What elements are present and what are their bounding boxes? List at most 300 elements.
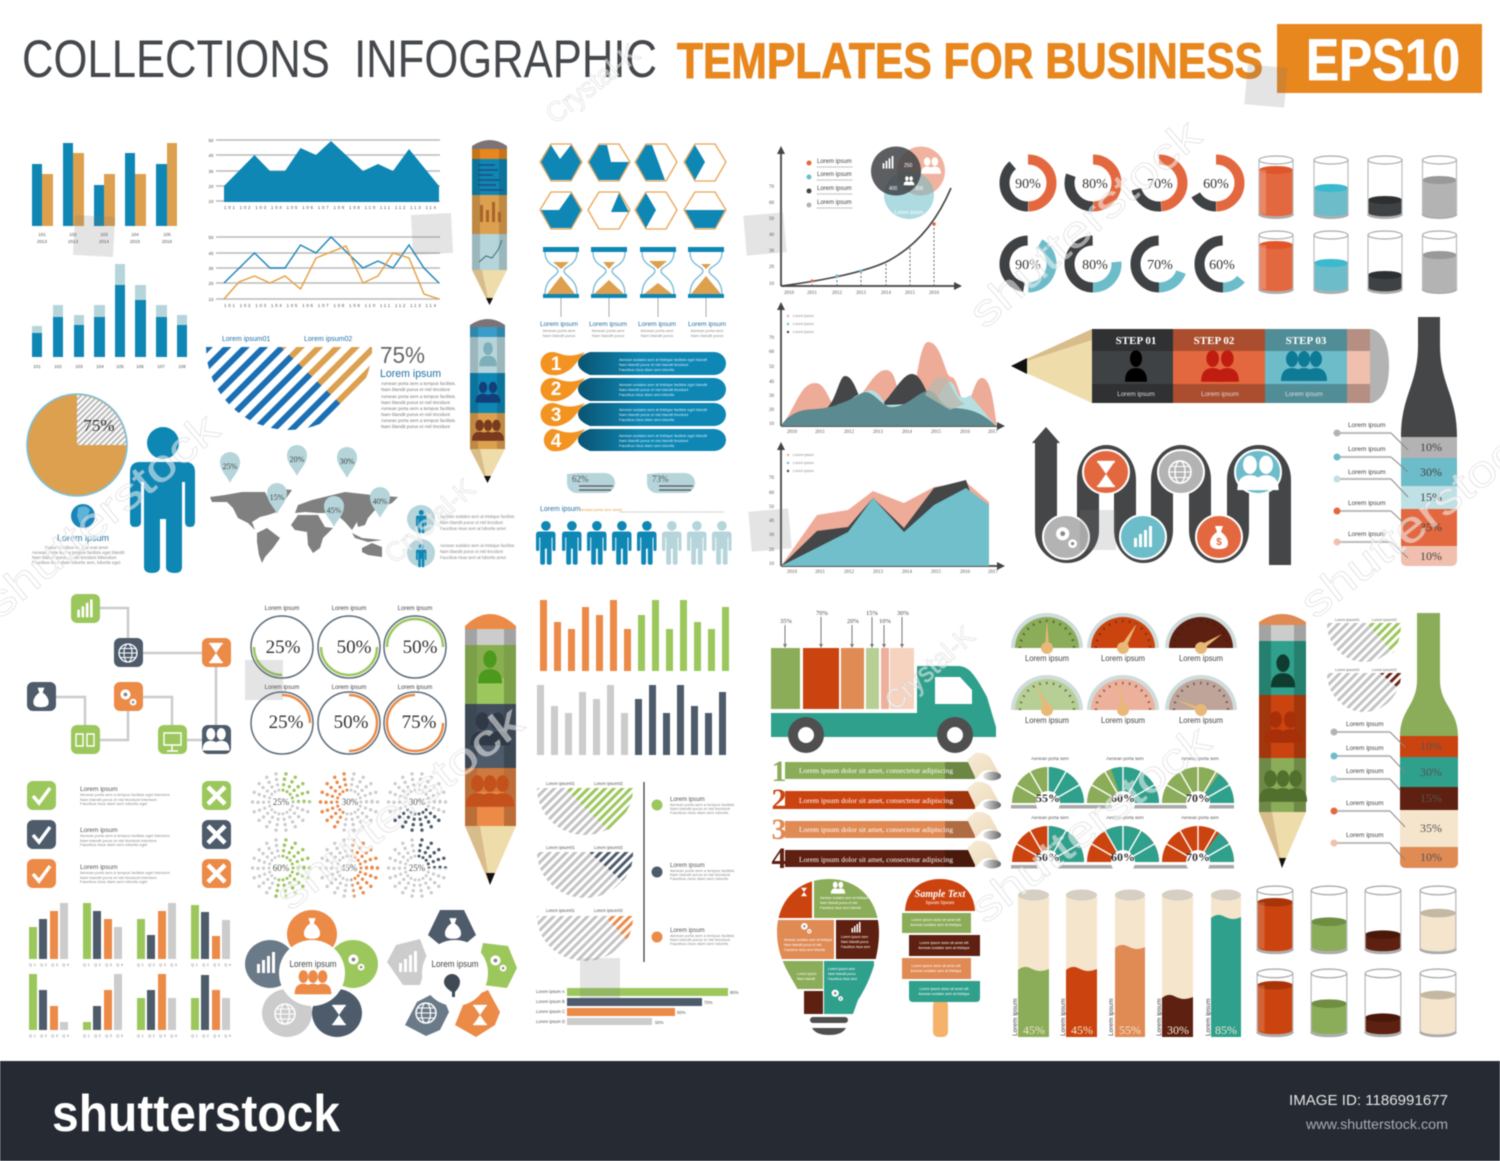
hourglasses with labels: Aenean porta sem xyxy=(543,328,576,333)
tube level chart: 55% xyxy=(1119,1023,1141,1037)
light bulb infographic: Nam blandit purus xyxy=(841,940,869,944)
bottle infographic green: 30% xyxy=(1420,765,1442,779)
flower diagram with circles xyxy=(245,910,378,1037)
layered area chart: 60 xyxy=(769,491,774,496)
light bulb infographic: Aenean sodales sem at tristique xyxy=(820,896,868,900)
hatched half-circle charts with legend: Lorem ipsum xyxy=(670,797,705,803)
tube level chart: 45% xyxy=(1023,1023,1045,1037)
bar chart: stacked blue bars: 105 xyxy=(116,364,124,369)
map legend with people icons: Nam blandit purus et nisl tincidunt xyxy=(440,520,504,525)
horizontal bar chart xyxy=(536,988,739,1025)
circular gauge rings: 25% xyxy=(269,712,304,733)
bar chart: paired blue and tan bars: 2016 xyxy=(162,239,173,244)
numbered scroll banners: 1 xyxy=(772,755,786,788)
popsicle signpost infographic: Aenean sodales sem at tristique xyxy=(910,969,962,973)
layered area chart: 40 xyxy=(769,519,774,524)
donut charts row one: 60% xyxy=(1203,177,1229,192)
mountain area chart: 10 xyxy=(769,422,774,427)
checklist with check and cross icons: Nam blandit purus et nisl tincidunt interdum xyxy=(80,838,157,843)
layered area chart: Lorem ipsum xyxy=(793,461,814,465)
tube level chart: 30% xyxy=(1167,1023,1189,1037)
bar chart: stacked blue bars xyxy=(32,264,187,369)
bottle callouts green: Lorem ipsum xyxy=(1346,800,1384,807)
map legend with people icons: Aenean sodales sem at tristique facilisis xyxy=(440,514,514,519)
bottle callouts dark: Lorem ipsum xyxy=(1348,531,1386,538)
world map with percentage pins: 25% xyxy=(223,462,238,471)
checklist with check and cross icons: Nam blandit purus et nisl tincidunt interdum xyxy=(80,797,157,802)
checklist with check and cross icons: Aenean porta sem a tempus facilisis eget interdum xyxy=(80,870,170,875)
curve chart with venn diagram: 40 xyxy=(769,233,774,238)
donut charts row one: 70% xyxy=(1147,177,1173,192)
layered area chart: 70 xyxy=(769,476,774,481)
mountain area chart: 70 xyxy=(769,336,774,341)
area chart: 20 xyxy=(208,184,214,189)
curve chart with venn diagram: Lorem ipsum xyxy=(895,210,923,216)
checklist with check and cross icons: Lorem ipsum xyxy=(80,827,118,834)
area chart: 50 xyxy=(208,138,214,143)
hatched half-circle charts with legend: Lorem ipsum01 xyxy=(546,908,576,913)
numbered ribbon list: Nam blandit purus et nisl blandit tincidunt xyxy=(619,413,689,417)
bottle infographic green: 35% xyxy=(1420,821,1442,835)
checklist with check and cross icons: Faucibus risus diam sem lobortis eget xyxy=(80,879,148,884)
title xyxy=(22,24,1482,93)
curve chart with venn diagram: 2016 xyxy=(929,291,940,296)
hatched half-circle chart with 75% text: Nam blandit purus et nisl tincidunt xyxy=(381,400,451,405)
curve chart with venn diagram: 50 xyxy=(769,217,774,222)
hourglasses with labels xyxy=(540,247,727,338)
hatched half-circle charts with legend: Lorem ipsum02 xyxy=(594,781,624,786)
hatched half-circle chart with 75% text xyxy=(206,336,456,440)
popsicle signpost infographic: Aenean sodales sem at tristique xyxy=(918,946,970,950)
tube level chart: Lorem ipsum xyxy=(1108,998,1115,1036)
light bulb infographic: Nam blandit purus xyxy=(828,972,856,976)
bar chart: paired blue and tan bars: 2013 xyxy=(37,239,48,244)
half-round percentage gauges green: 60% xyxy=(1111,791,1135,805)
bottle infographic green: 10% xyxy=(1420,850,1442,864)
popsicle signpost infographic: Lorem ipsum dolor sit amet elit xyxy=(920,941,968,945)
half-round percentage gauges green: Aenean porta sem xyxy=(1031,756,1069,761)
light bulb infographic: Faucibus risus sem xyxy=(828,977,857,981)
circular gauge rings xyxy=(251,606,446,754)
popsicle signpost infographic: Lorem ipsum dolor sit amet elit xyxy=(912,964,960,968)
hourglasses with labels: Lorem ipsum xyxy=(589,321,628,328)
numbered ribbon list: Faucibus risus diam sem lobortis xyxy=(619,368,674,372)
small grouped bar charts: Q1 Q2 Q3 Q4 xyxy=(29,963,69,967)
mountain area chart xyxy=(769,302,1005,435)
tube level chart: Lorem ipsum xyxy=(1060,998,1067,1036)
hatched half-circle charts with legend: Aenean porta sem a tempus facilisis xyxy=(670,802,734,807)
hatched half-circle charts with legend: Faucibus risus diam sem lobortis xyxy=(670,876,728,881)
radial dot charts: 25% xyxy=(273,797,290,807)
pie chart 75% xyxy=(27,394,127,496)
curve chart with venn diagram: 250 xyxy=(904,163,913,169)
bottle infographic dark: 15% xyxy=(1420,490,1442,504)
radial dot charts: 30% xyxy=(409,797,426,807)
curve chart with venn diagram: Lorem ipsum xyxy=(817,200,852,206)
hatched half-circle chart with 75% text: Aenean porta sem a tempus facilisis. xyxy=(381,381,456,386)
donut charts row two: 70% xyxy=(1147,258,1173,273)
serpentine timeline with icons: $ xyxy=(1216,537,1222,548)
map legend with people icons: Aenean sodales sem at tristique facilisis xyxy=(440,543,514,548)
hourglasses with labels: Lorem ipsum xyxy=(540,321,579,328)
numbered ribbon list: 3 xyxy=(551,405,561,426)
bar chart: paired blue and tan bars: 105 xyxy=(163,232,171,237)
bottle callouts dark: Lorem ipsum xyxy=(1348,500,1386,507)
speech bubbles 62% and 73% xyxy=(567,473,695,493)
title: TEMPLATES FOR BUSINESS xyxy=(677,33,1263,89)
world map with percentage pins: 40% xyxy=(373,497,388,506)
bar chart: orange and green bars xyxy=(540,600,729,671)
hatched half-circle chart with 75% text: Aenean porta sem a tempus facilisis. xyxy=(381,406,456,411)
popsicle signpost infographic: Sample Text xyxy=(915,889,966,900)
light bulb infographic xyxy=(777,879,879,1035)
donut charts row two: 80% xyxy=(1082,258,1108,273)
numbered ribbon list: Aenean sodales sem at tristique facilisis eget blandit xyxy=(619,383,708,387)
bar chart: stacked blue bars: 101 xyxy=(33,364,41,369)
stock watermarks: Crystal-K xyxy=(878,620,981,716)
bottle infographic dark: 10% xyxy=(1420,549,1442,563)
popsicle signpost infographic: lipsum lipsum xyxy=(926,901,954,906)
glass cylinders row one xyxy=(1259,156,1456,218)
light bulb infographic: Faucibus risus sem lobortis xyxy=(820,906,861,910)
area chart: 30 xyxy=(208,169,214,174)
circular gauge rings: Lorem ipsum xyxy=(332,606,366,612)
horizontal bar chart: 50% xyxy=(655,1020,664,1025)
light bulb infographic: Lorem ipsum xyxy=(797,972,817,976)
bar chart: stacked blue bars: 108 xyxy=(178,364,186,369)
layered area chart: 2016 xyxy=(960,570,970,575)
numbered scroll banners xyxy=(772,753,1001,875)
numbered ribbon list: 2 xyxy=(551,379,561,400)
bar chart: paired blue and tan bars: 103 xyxy=(100,232,108,237)
speedometer gauges: Lorem ipsum xyxy=(1101,716,1145,725)
curve chart with venn diagram: 2014 xyxy=(881,291,892,296)
line chart: 20 xyxy=(208,281,214,286)
hourglasses with labels: Aenean porta sem xyxy=(691,328,724,333)
curve chart with venn diagram: 20 xyxy=(769,265,774,270)
mountain area chart: 2013 xyxy=(873,430,884,435)
layered area chart: 2013 xyxy=(873,570,884,575)
flower diagram with hexagons xyxy=(387,910,517,1037)
curve chart with venn diagram: 2010 xyxy=(784,291,794,296)
half-round percentage gauges red: 50% xyxy=(1036,850,1060,864)
donut charts row two: 60% xyxy=(1209,258,1235,273)
bar chart: stacked blue bars: 106 xyxy=(136,364,144,369)
popsicle signpost infographic: Aenean sodales sem at tristique xyxy=(918,992,970,996)
layered area chart: 20 xyxy=(769,548,774,553)
layered area chart: 2012 xyxy=(844,570,854,575)
curve chart with venn diagram: Lorem ipsum xyxy=(817,172,852,178)
speedometer gauges xyxy=(1011,613,1237,725)
glass cylinders row two xyxy=(1259,231,1456,293)
hatched half-circle charts with legend: Lorem ipsum02 xyxy=(594,908,624,913)
bottle callouts green xyxy=(1330,721,1405,860)
small grouped bar charts: Q1 Q2 Q3 Q4 xyxy=(191,1034,231,1038)
circular gauge rings: Lorem ipsum xyxy=(332,685,366,691)
flower diagram with hexagons: Lorem ipsum xyxy=(432,959,479,970)
horizontal pencil steps: Lorem ipsum xyxy=(1117,391,1155,398)
bottle infographic dark: 10% xyxy=(1420,440,1442,454)
world map with percentage pins: 20% xyxy=(290,455,305,464)
truck chart: 10% xyxy=(879,618,892,625)
horizontal pencil steps: Lorem ipsum xyxy=(1285,391,1323,398)
truck chart: 70% xyxy=(816,610,829,617)
small hatched half-circles: Lorem ipsum02 xyxy=(1372,668,1397,672)
world map with percentage pins xyxy=(210,445,398,563)
speech bubbles 62% and 73%: 73% xyxy=(652,474,669,484)
world map with percentage pins: 30% xyxy=(340,457,355,466)
radial dot charts: 25% xyxy=(409,863,426,873)
small grouped bar charts: Q1 Q2 Q3 Q4 xyxy=(83,1034,123,1038)
bottle callouts dark xyxy=(1334,422,1408,558)
bar chart: stacked blue bars: 107 xyxy=(157,364,165,369)
small grouped bar charts: Q1 Q2 Q3 Q4 xyxy=(191,963,231,967)
hourglasses with labels: Lorem ipsum xyxy=(688,321,727,328)
half-round percentage gauges red: 60% xyxy=(1111,850,1135,864)
hatched half-circle charts with legend: Lorem ipsum02 xyxy=(594,845,624,850)
pencil: green navy orange xyxy=(465,614,516,885)
truck chart xyxy=(771,610,996,753)
curve chart with venn diagram: 10 xyxy=(769,282,774,287)
hatched half-circle chart with 75% text: Nam blandit purus et nisl tincidunt xyxy=(381,387,451,392)
hatched half-circle chart with 75% text: 75% xyxy=(380,342,425,368)
hatched half-circle charts with legend: Nam blandit purus et nisl tincidunt xyxy=(670,937,731,942)
small hatched half-circles: Lorem ipsum01 xyxy=(1335,668,1360,672)
stock watermarks: shutterstock xyxy=(266,696,534,920)
small hatched half-circles xyxy=(1327,618,1401,712)
mountain area chart: 50 xyxy=(769,365,774,370)
truck chart: 15% xyxy=(866,610,879,617)
hatched half-circle charts with legend: Nam blandit purus et nisl tincidunt xyxy=(670,872,731,877)
popsicle signpost infographic xyxy=(902,879,980,1037)
area chart: 101 102 103 104 105 106 107 108 109 110 111 112 113 114 xyxy=(224,205,436,210)
footer bar: shutterstock xyxy=(52,1085,340,1143)
circular gauge rings: 50% xyxy=(334,712,369,733)
numbered scroll banners: 2 xyxy=(772,783,786,816)
hourglasses with labels: Nam blandit purus xyxy=(592,333,624,338)
horizontal bar chart: 80% xyxy=(730,990,739,995)
hatched half-circle chart with 75% text: Aenean porta sem a tempus facilisis. xyxy=(381,418,456,423)
mountain area chart: Lorem ipsum xyxy=(793,314,814,318)
tube level chart: Lorem ipsum xyxy=(1205,998,1212,1036)
checklist with check and cross icons: Aenean porta sem a tempus facilisis eget interdum xyxy=(80,833,170,838)
footer bar: www.shutterstock.com xyxy=(1305,1116,1448,1132)
mountain area chart: 20 xyxy=(769,408,774,413)
small grouped bar charts: Q1 Q2 Q3 Q4 xyxy=(29,1034,69,1038)
light bulb infographic: Faucibus risus sem xyxy=(841,945,870,949)
icon: standing person xyxy=(130,427,195,573)
bottle callouts green: Lorem ipsum xyxy=(1346,721,1384,728)
checklist with check and cross icons: Faucibus risus diam sem lobortis eget xyxy=(80,842,148,847)
serpentine timeline with icons xyxy=(1032,427,1281,565)
donut charts row one xyxy=(1004,158,1240,208)
line chart: 10 xyxy=(208,297,214,302)
checklist with check and cross icons xyxy=(27,781,231,888)
layered area chart: 30 xyxy=(769,533,774,538)
half-round percentage gauges red: 70% xyxy=(1186,850,1210,864)
bottle callouts dark: Lorem ipsum xyxy=(1348,422,1386,429)
area chart: 10 xyxy=(208,199,214,204)
radial dot charts xyxy=(252,774,446,896)
bar chart: stacked blue bars: 102 xyxy=(54,364,62,369)
small hatched half-circles: Lorem ipsum01 xyxy=(1335,618,1360,622)
globe caption block: Lorem ipsum xyxy=(57,533,109,543)
numbered scroll banners: Lorem ipsum dolor sit amet, consectetur adipiscing xyxy=(799,855,953,864)
title: EPS10 xyxy=(1306,28,1460,93)
tube level chart xyxy=(1012,890,1241,1037)
circular gauge rings: 25% xyxy=(266,637,301,658)
glass beakers row two xyxy=(1257,969,1456,1036)
hatched half-circle charts with legend xyxy=(537,781,734,962)
people pictogram row xyxy=(536,506,732,565)
bottle infographic dark xyxy=(1401,317,1457,566)
bottle callouts green: Lorem ipsum xyxy=(1346,832,1384,839)
tube level chart: Lorem ipsum xyxy=(1012,998,1019,1036)
hourglasses with labels: Nam blandit purus xyxy=(691,333,723,338)
bar chart: paired blue and tan bars: 2014 xyxy=(99,239,110,244)
curve chart with venn diagram: 2011 xyxy=(807,291,817,296)
footer bar xyxy=(0,1061,1500,1161)
layered area chart: 10 xyxy=(769,562,774,567)
bottle callouts green: Lorem ipsum xyxy=(1346,745,1384,752)
numbered ribbon list: Aenean sodales sem at tristique facilisis eget blandit xyxy=(619,408,708,412)
numbered ribbon list: 1 xyxy=(551,354,562,375)
stock watermarks: Crystal-K xyxy=(540,37,646,130)
small grouped bar charts: Q1 Q2 Q3 Q4 xyxy=(137,963,177,967)
bottle infographic green: 10% xyxy=(1420,739,1442,753)
horizontal pencil steps xyxy=(1011,329,1389,403)
bottle callouts dark: Lorem ipsum xyxy=(1348,446,1386,453)
small grouped bar charts: Q1 Q2 Q3 Q4 xyxy=(137,1034,177,1038)
horizontal bar chart: Lorem ipsum B xyxy=(536,999,565,1004)
line chart xyxy=(208,235,440,308)
layered area chart xyxy=(769,442,1005,575)
mountain area chart: Lorem ipsum xyxy=(793,330,814,334)
numbered ribbon list: Faucibus risus diam sem lobortis xyxy=(619,418,674,422)
line chart: 50 xyxy=(208,235,214,240)
numbered ribbon list: Faucibus risus diam sem lobortis xyxy=(619,444,674,448)
light bulb infographic: Nam blandit purus et nisl xyxy=(784,943,822,947)
stock watermarks: shutterstock xyxy=(961,715,1221,933)
flower diagram with circles: Lorem ipsum xyxy=(290,959,337,970)
curve chart with venn diagram: 60 xyxy=(769,201,774,206)
light bulb infographic: Aenean sodales sem at tristique xyxy=(784,938,832,942)
numbered scroll banners: 3 xyxy=(772,813,786,846)
curve chart with venn diagram: 30 xyxy=(769,249,774,254)
hourglasses with labels: Aenean porta sem xyxy=(592,328,625,333)
line chart: 101 102 103 104 105 106 107 108 109 110 111 112 113 114 xyxy=(224,303,436,308)
map legend with people icons: Nam blandit purus et nisl tincidunt xyxy=(440,549,504,554)
footer bar: IMAGE ID: 1186991677 xyxy=(1289,1092,1448,1109)
map legend with people icons: Faucibus risus sem at lobortis amet xyxy=(440,555,507,560)
hourglasses with labels: Nam blandit purus xyxy=(543,333,575,338)
curve chart with venn diagram: Lorem ipsum xyxy=(817,186,852,192)
circular gauge rings: Lorem ipsum xyxy=(398,685,432,691)
speedometer gauges: Lorem ipsum xyxy=(1025,716,1069,725)
speedometer gauges: Lorem ipsum xyxy=(1179,716,1223,725)
horizontal bar chart: Lorem ipsum D xyxy=(536,1019,565,1024)
half-round percentage gauges green: Aenean porta sem xyxy=(1181,756,1219,761)
circular gauge rings: Lorem ipsum xyxy=(265,685,299,691)
numbered ribbon list: Aenean sodales sem at tristique facilisis eget blandit xyxy=(619,358,708,362)
map legend with people icons: Faucibus risus sem at lobortis amet xyxy=(440,526,507,531)
circular gauge rings: 75% xyxy=(402,712,437,733)
circular gauge rings: 50% xyxy=(337,637,372,658)
hatched half-circle chart with 75% text: Aenean porta sem a tempus facilisis. xyxy=(381,394,456,399)
horizontal pencil steps: STEP 02 xyxy=(1194,335,1235,347)
small grouped bar charts xyxy=(29,903,231,1038)
bar chart: paired blue and tan bars: 2013 xyxy=(68,239,79,244)
light bulb infographic: Lorem ipsum sem xyxy=(841,935,868,939)
truck chart: 20% xyxy=(847,618,860,625)
hourglasses with labels: Lorem ipsum xyxy=(638,321,677,328)
half-round percentage gauges red xyxy=(1011,815,1234,874)
curve chart with venn diagram: Lorem ipsum xyxy=(817,159,852,165)
people pictogram row: Aenean porta sem amet xyxy=(579,507,623,512)
horizontal bar chart: Lorem ipsum C xyxy=(536,1009,565,1014)
stock watermarks: shutterstock xyxy=(959,110,1211,338)
area chart xyxy=(208,138,440,210)
numbered ribbon list: 4 xyxy=(551,431,562,452)
pencil: blue chart sections xyxy=(472,140,507,305)
hatched half-circle charts with legend: Faucibus risus diam sem lobortis xyxy=(670,810,728,815)
area chart: 40 xyxy=(208,153,214,158)
layered area chart: 2015 xyxy=(931,570,942,575)
tube level chart: 45% xyxy=(1071,1023,1093,1037)
donut charts row one: 80% xyxy=(1082,177,1108,192)
small grouped bar charts: Q1 Q2 Q3 Q4 xyxy=(83,963,123,967)
world map with percentage pins: 45% xyxy=(327,506,342,515)
circular gauge rings: 50% xyxy=(403,637,438,658)
bottle infographic green: 15% xyxy=(1420,791,1442,805)
layered area chart: 2014 xyxy=(902,570,912,575)
mountain area chart: 2010 xyxy=(787,430,798,435)
numbered ribbon list: Nam blandit purus et nisl blandit tincidunt xyxy=(619,388,689,392)
curve chart with venn diagram xyxy=(769,146,962,296)
horizontal pencil steps: STEP 03 xyxy=(1286,335,1327,347)
light bulb infographic: Nam blandit purus et nisl xyxy=(820,901,858,905)
mountain area chart: 2011 xyxy=(815,430,825,435)
numbered scroll banners: Lorem ipsum dolor sit amet, consectetur adipiscing xyxy=(799,796,953,805)
bar chart: paired blue and tan bars xyxy=(32,143,177,244)
bottle infographic dark: 35% xyxy=(1420,520,1442,534)
hatched half-circle charts with legend: Lorem ipsum01 xyxy=(546,845,576,850)
donut charts row two: 90% xyxy=(1015,258,1041,273)
map legend with people icons xyxy=(407,505,514,567)
curve chart with venn diagram: 300 xyxy=(915,186,924,192)
half-round percentage gauges red: Aenean porta sem xyxy=(1106,815,1144,820)
title: COLLECTIONS INFOGRAPHIC xyxy=(22,30,657,89)
light bulb infographic: Lorem ipsum sem xyxy=(828,967,855,971)
radial dot charts: 60% xyxy=(273,863,290,873)
mountain area chart: 2015 xyxy=(931,430,942,435)
globe caption block xyxy=(32,504,125,565)
bar chart: stacked blue bars: 104 xyxy=(96,364,104,369)
globe caption block: Faucibus risus diam lobortis sem, lobortis eget xyxy=(32,560,121,565)
hatched half-circle chart with 75% text: Nam blandit purus et nisl tincidunt xyxy=(381,412,451,417)
hatched half-circle charts with legend: Lorem ipsum xyxy=(670,863,705,869)
pencil: teal red green xyxy=(1259,614,1307,868)
layered area chart: 2010 xyxy=(787,570,798,575)
hatched half-circle chart with 75% text: Nam blandit purus et nisl tincidunt xyxy=(381,424,451,429)
globe caption block: Fusce faucibus mi quis erat amet xyxy=(45,545,109,550)
bottle infographic green xyxy=(1400,613,1458,868)
speech bubbles 62% and 73%: 62% xyxy=(572,474,589,484)
numbered ribbon list: Nam blandit purus et nisl blandit tincidunt xyxy=(619,363,689,367)
globe caption block: Nam blandit purus et nisl tincidunt bibendum xyxy=(32,555,117,560)
pencil: blue people sections xyxy=(470,319,505,483)
hatched half-circle charts with legend: Lorem ipsum xyxy=(670,928,705,934)
